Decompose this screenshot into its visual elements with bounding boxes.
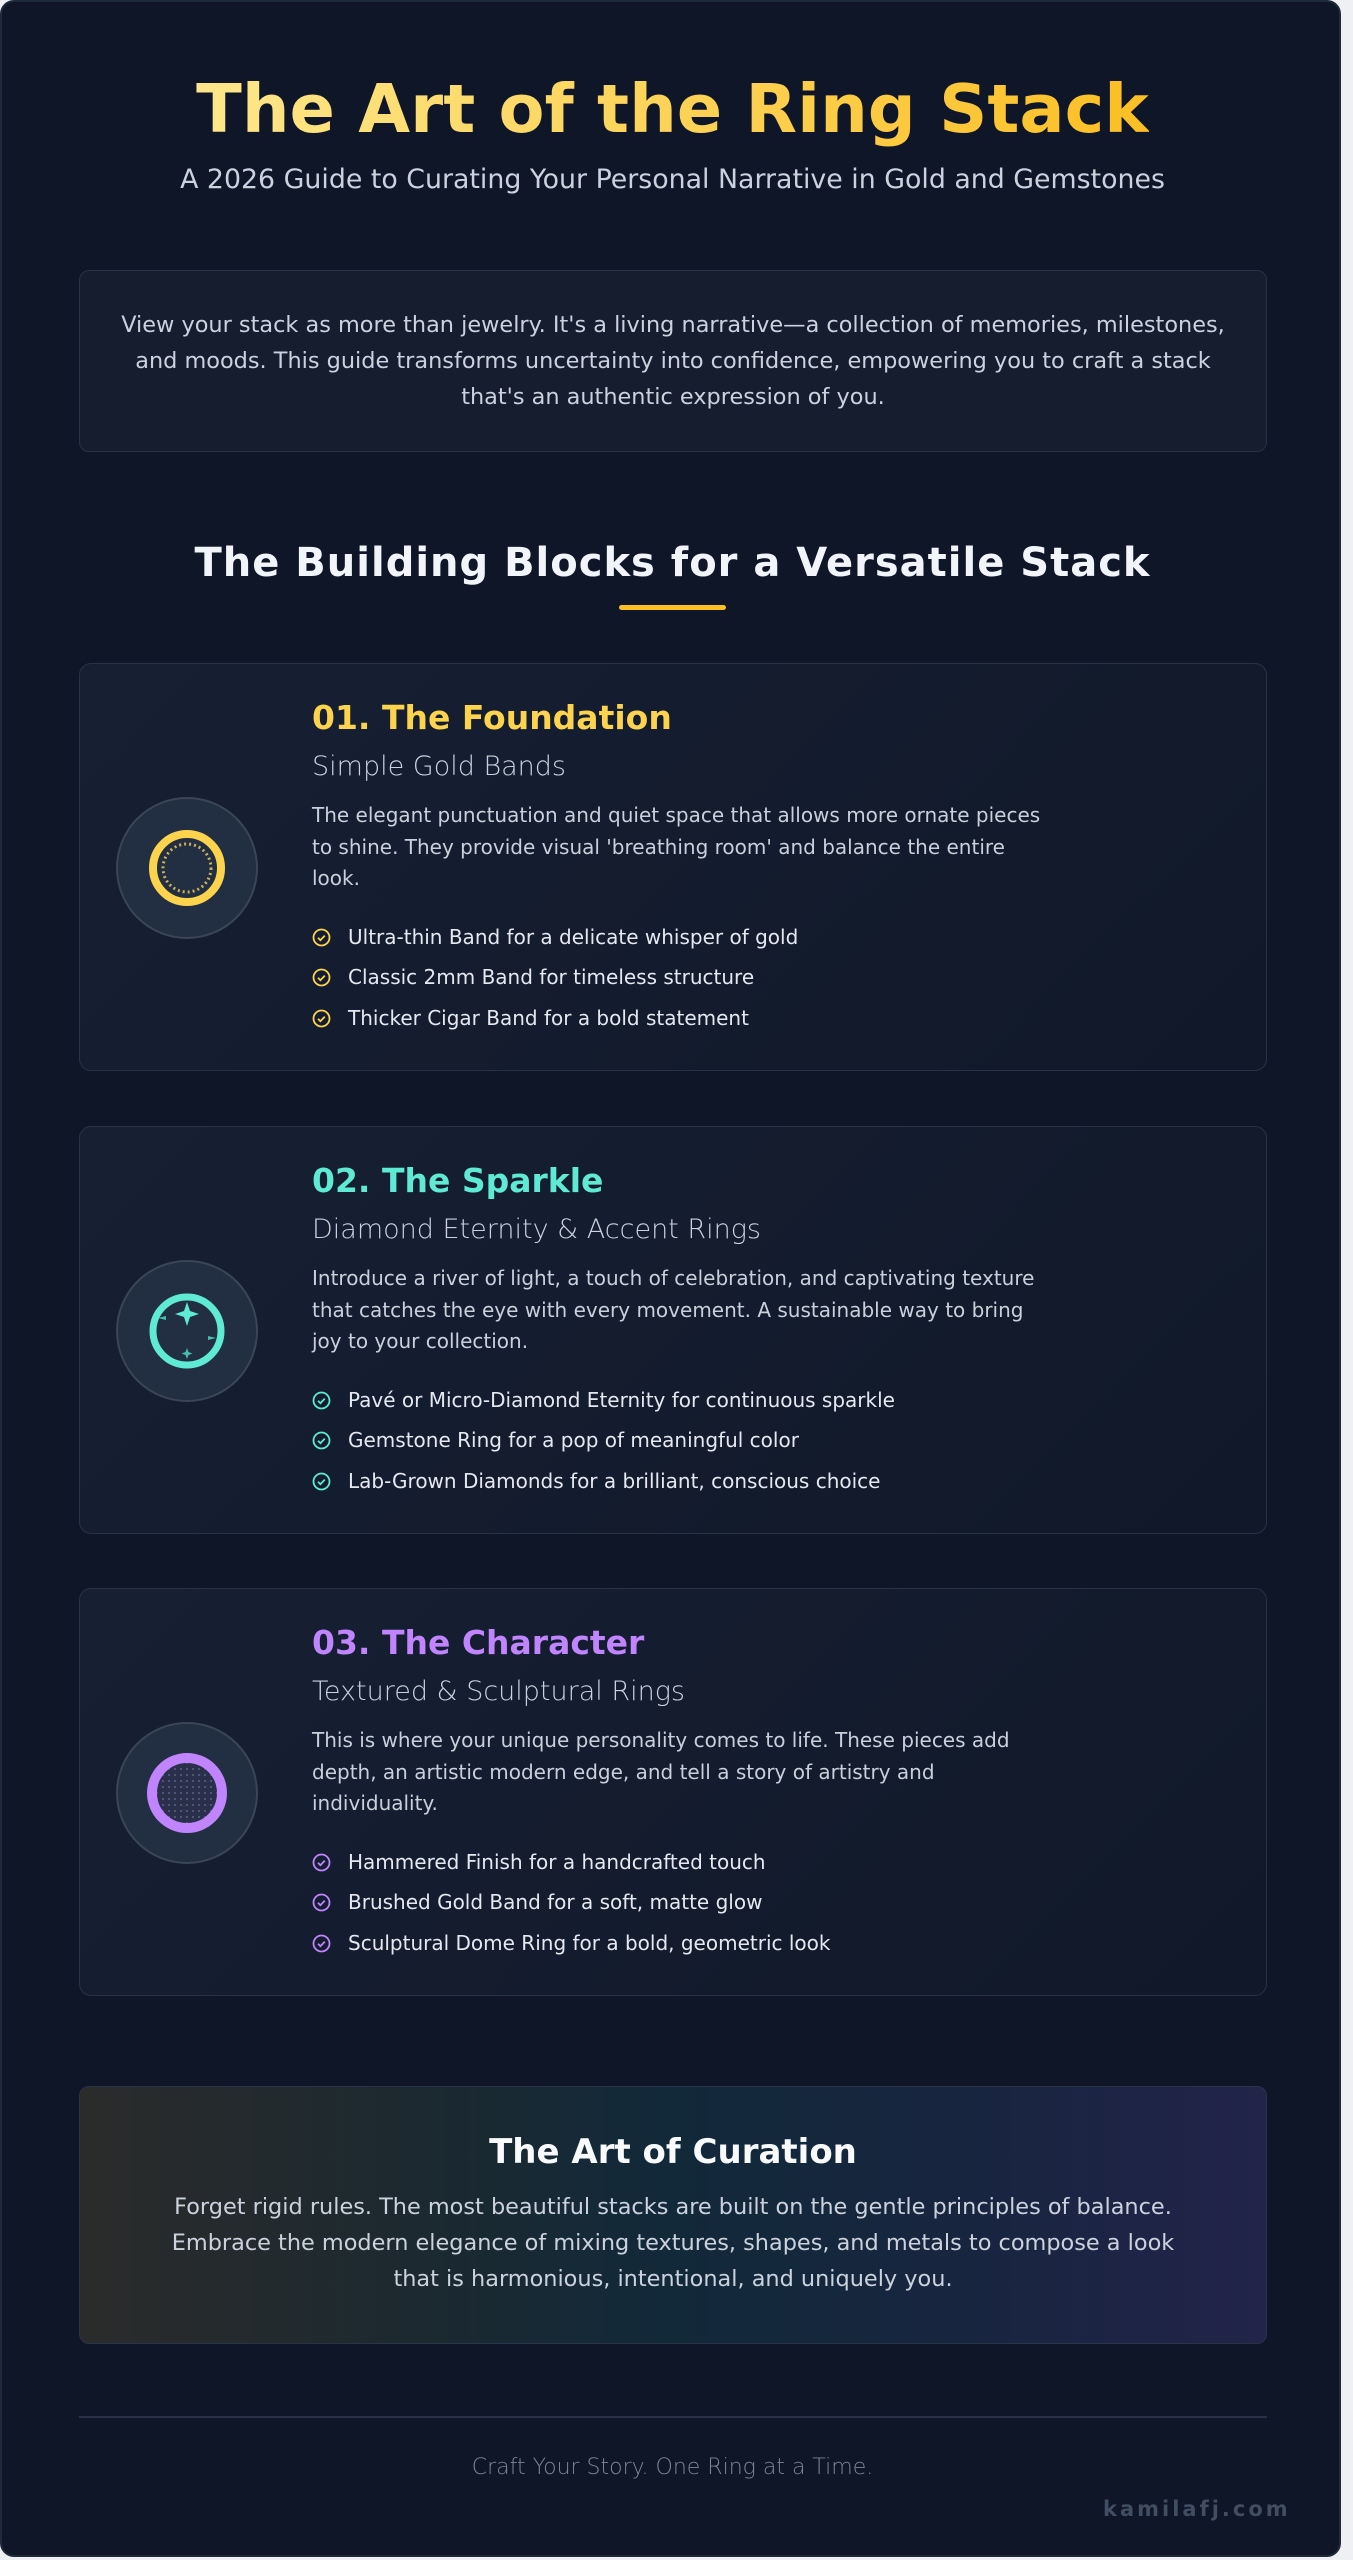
card title: 03. The Character [312, 1623, 644, 1662]
card title: 01. The Foundation [312, 698, 672, 737]
bullet list: Sculptural Dome Ring for a bold, geometric look [348, 1930, 830, 1954]
card: character: individuality. [312, 1791, 438, 1815]
card: character: Textured & Sculptural Rings [312, 1676, 685, 1707]
bullet list: Classic 2mm Band for timeless structure [348, 965, 754, 989]
intro box [79, 270, 1267, 452]
card: sparkle [79, 1126, 1267, 1534]
bullet list: Gemstone Ring for a pop of meaningful color [348, 1428, 799, 1452]
brand watermark: kamilafj.com [1103, 2497, 1291, 2521]
bullet list: Pavé or Micro-Diamond Eternity for continuous sparkle [348, 1388, 895, 1412]
bullet list: Ultra-thin Band for a delicate whisper of gold [348, 924, 798, 948]
footer tagline: Craft Your Story. One Ring at a Time. [472, 2455, 873, 2480]
card: character: depth, an artistic modern edge, and tell a story of artistry and [312, 1760, 935, 1784]
card: sparkle: Introduce a river of light, a touch of celebration, and captivating texture [312, 1266, 1034, 1290]
subtitle: A 2026 Guide to Curating Your Personal Narrative in Gold and Gemstones [180, 164, 1165, 195]
card: character [79, 1588, 1267, 1996]
icon: gold band [116, 797, 258, 939]
bullet list [312, 1850, 830, 1954]
card: foundation: Simple Gold Bands [312, 751, 566, 782]
card: sparkle: that catches the eye with every movement. A sustainable way to bring [312, 1298, 1023, 1322]
card: foundation: look. [312, 866, 360, 890]
card: sparkle: joy to your collection. [312, 1329, 528, 1353]
title: The Art of the Ring Stack [196, 70, 1149, 148]
card: character: This is where your unique personality comes to life. These pieces add [312, 1728, 1010, 1752]
card title: 02. The Sparkle [312, 1161, 603, 1200]
bullet list: Hammered Finish for a handcrafted touch [348, 1850, 766, 1874]
bullet list [312, 924, 798, 1030]
card: foundation: The elegant punctuation and quiet space that allows more ornate pieces [312, 803, 1040, 827]
bullet list: Lab-Grown Diamonds for a brilliant, conscious choice [348, 1468, 880, 1492]
card: foundation [79, 663, 1267, 1071]
icon: diamond ring [116, 1260, 258, 1402]
icon: textured ring [116, 1722, 258, 1864]
curation title: The Art of Curation [489, 2132, 857, 2172]
card: sparkle: Diamond Eternity & Accent Rings [312, 1214, 761, 1245]
bullet list: Brushed Gold Band for a soft, matte glow [348, 1890, 762, 1914]
intro box: View your stack as more than jewelry. It's a living narrative—a collection of memories, milestones, and moods. This guide transforms uncertainty into confidence, empowering you to craft a stack that's an authentic expression of you. [121, 312, 1225, 410]
card: foundation: to shine. They provide visual 'breathing room' and balance the entire [312, 834, 1005, 858]
section heading: The Building Blocks for a Versatile Stack [194, 540, 1151, 586]
bullet list [312, 1388, 895, 1492]
bullet list: Thicker Cigar Band for a bold statement [348, 1006, 749, 1030]
curation text: Forget rigid rules. The most beautiful stacks are built on the gentle principles of balance. Embrace the modern elegance of mixing textures, shapes, and metals to compose a look that is harmonious, intentional, and uniquely you. [172, 2194, 1174, 2292]
panel: art of curation [79, 2086, 1267, 2344]
heading underline [619, 605, 726, 610]
